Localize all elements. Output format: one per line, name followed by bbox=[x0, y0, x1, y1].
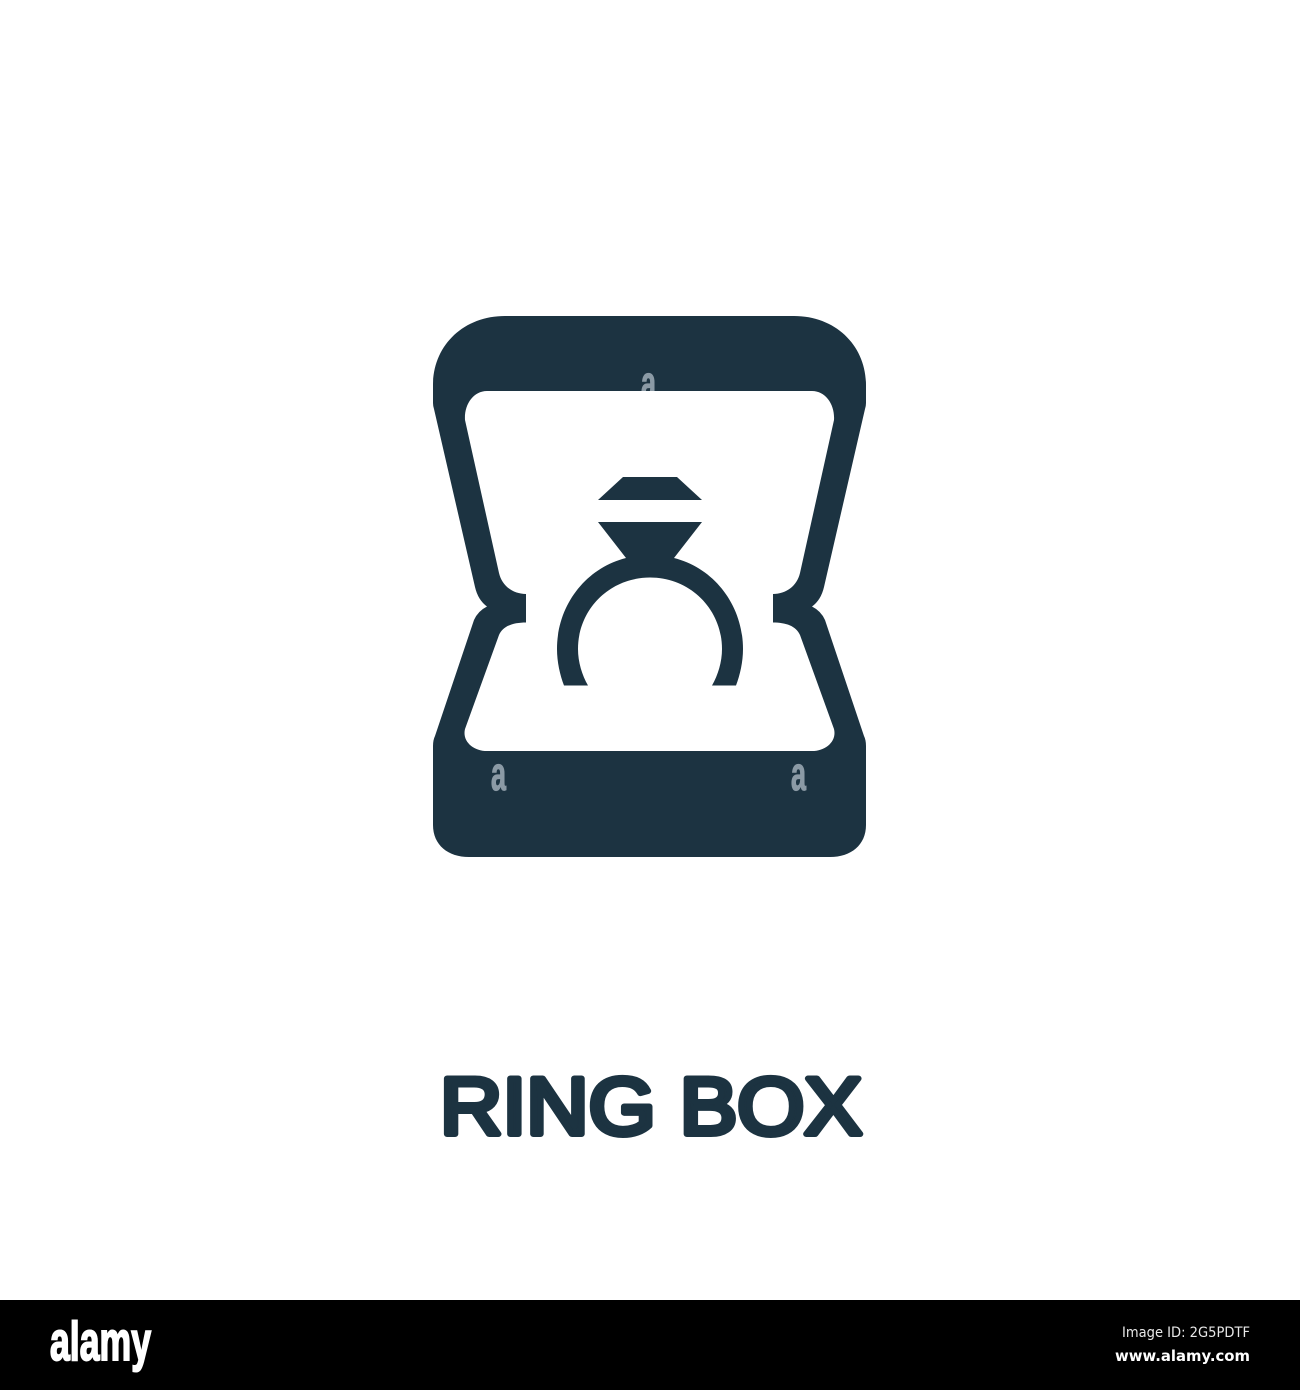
image id: Image ID: 2G5PDTF bbox=[1122, 1325, 1250, 1341]
box outline bbox=[433, 316, 866, 857]
ring gem top bbox=[598, 477, 702, 500]
watermark marks: a bbox=[491, 747, 506, 800]
footer bar bbox=[0, 1300, 1300, 1390]
watermark marks: a bbox=[791, 747, 806, 800]
title: RING BOX bbox=[440, 1062, 862, 1152]
watermark marks: a bbox=[641, 356, 656, 409]
website: www.alamy.com bbox=[1115, 1347, 1250, 1365]
alamy logo: alamy bbox=[50, 1310, 151, 1372]
icon: ring box bbox=[433, 316, 866, 857]
watermark marks bbox=[491, 356, 806, 800]
ring gem bottom and band bbox=[557, 522, 743, 686]
